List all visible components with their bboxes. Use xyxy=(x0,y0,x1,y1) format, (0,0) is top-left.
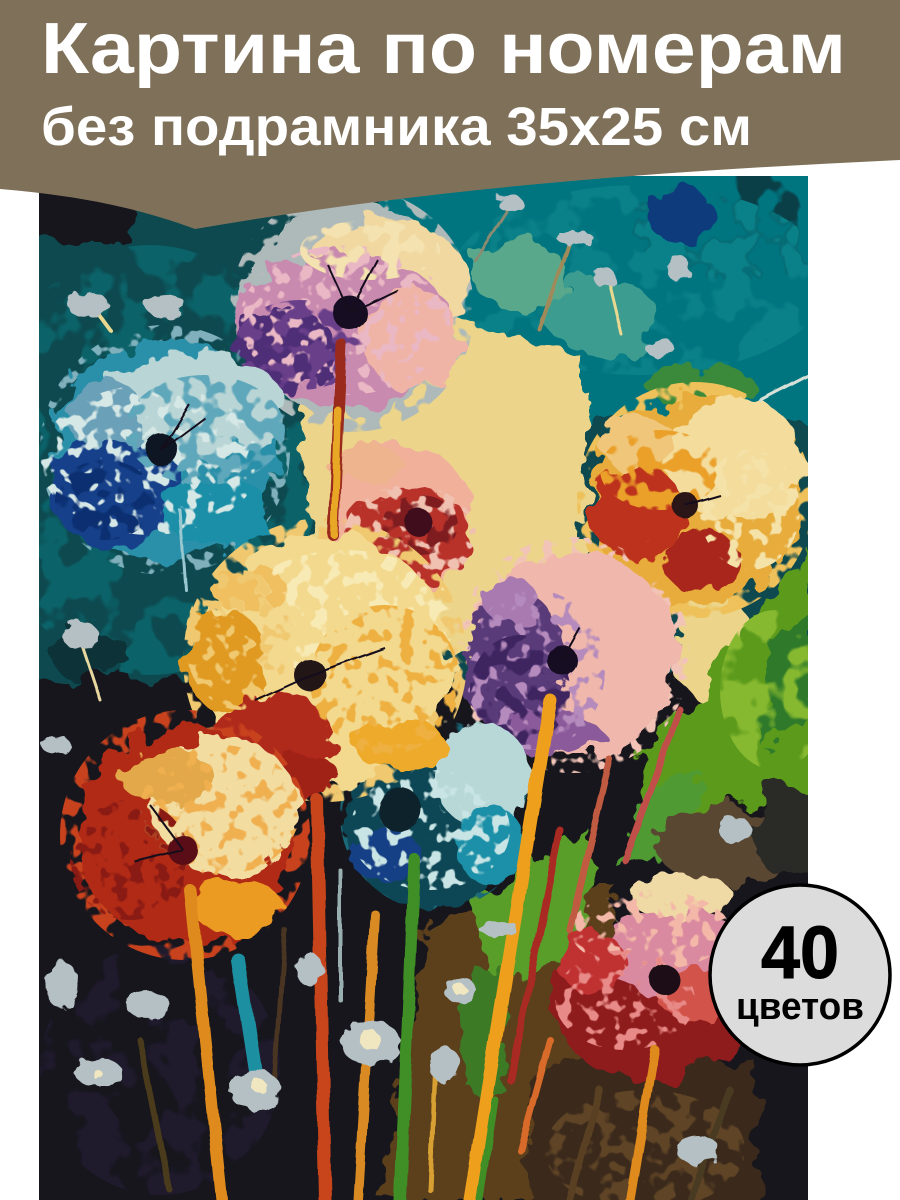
dandelion: small red xyxy=(325,445,476,595)
flying seeds xyxy=(42,195,751,1164)
subtitle: без подрамника 35х25 см xyxy=(41,97,752,157)
painting background xyxy=(39,176,808,1200)
dandelion: blue xyxy=(40,325,290,575)
dandelion centres and spokes xyxy=(135,260,720,995)
dandelion: pink and cream top xyxy=(230,188,474,432)
badge: 40 colours: 40 xyxy=(761,911,839,994)
stems xyxy=(80,205,808,1200)
cream backdrop xyxy=(300,320,585,660)
dandelion: orange right xyxy=(577,382,813,618)
dandelion: big yellow xyxy=(183,518,467,802)
badge: 40 colours: цветов xyxy=(736,986,864,1028)
painting: dandelions xyxy=(39,176,808,1200)
green foliage right xyxy=(635,555,815,860)
dandelion: purple and pink xyxy=(454,537,690,773)
header banner xyxy=(0,0,900,229)
badge: 40 colours xyxy=(710,885,890,1065)
dandelion: lower right red xyxy=(554,873,746,1081)
dandelion: teal xyxy=(340,720,530,910)
dandelion: red and cream lower left xyxy=(60,710,310,960)
brown lower centre xyxy=(380,880,620,1200)
title: Картина по номерам xyxy=(41,9,846,89)
